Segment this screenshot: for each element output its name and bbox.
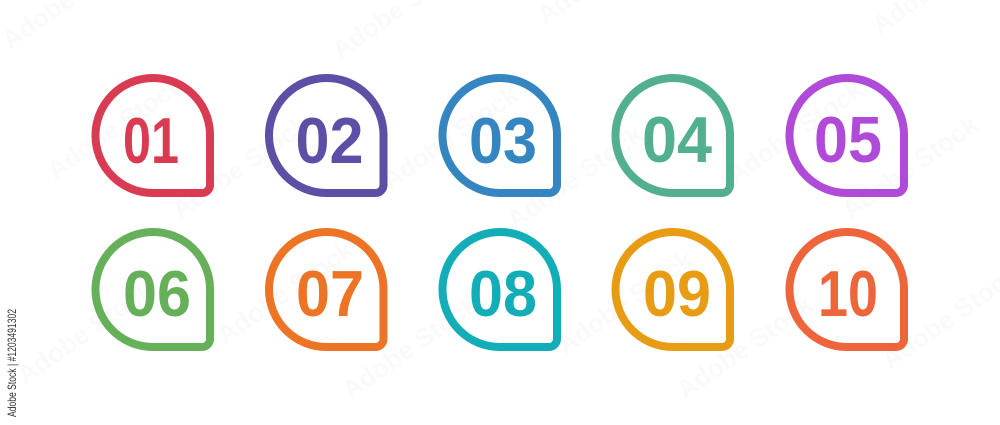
badge 08: 08 xyxy=(469,257,537,330)
watermark pattern: Adobe Stock xyxy=(836,109,984,225)
watermark pattern: Adobe Stock xyxy=(166,109,314,225)
badge 01: 01 xyxy=(123,104,179,177)
badge 01 xyxy=(95,78,210,193)
badge 10 xyxy=(789,232,904,347)
badge 05 xyxy=(789,78,904,193)
watermark pattern: Adobe Stock xyxy=(501,119,649,235)
badge 09: 09 xyxy=(643,257,711,330)
badge 08 xyxy=(442,232,557,347)
watermark pattern: Adobe Stock xyxy=(211,234,359,350)
watermark pattern: Adobe Stock xyxy=(41,69,189,185)
watermark pattern: Adobe Stock xyxy=(336,289,484,405)
badge 02 xyxy=(269,78,384,193)
badge 03: 03 xyxy=(469,104,537,177)
badge 10: 10 xyxy=(818,257,878,330)
badge 05: 05 xyxy=(814,103,882,176)
badge 04 xyxy=(615,78,730,193)
watermark pattern: Adobe Stock xyxy=(376,79,524,195)
badge 04: 04 xyxy=(642,103,712,176)
badge 09 xyxy=(615,232,730,347)
watermark pattern: Adobe Stock xyxy=(551,244,699,360)
badge 07 xyxy=(269,232,384,347)
badge 03 xyxy=(442,78,557,193)
watermark pattern: Adobe Stock xyxy=(671,289,819,405)
badge 06: 06 xyxy=(123,257,191,330)
badge 07: 07 xyxy=(296,257,364,330)
badge 02: 02 xyxy=(296,104,364,177)
stock id label: Adobe Stock | #1203491302 xyxy=(5,309,19,417)
watermark pattern: Adobe Stock xyxy=(721,74,869,190)
badge 06 xyxy=(95,232,210,347)
watermark pattern: Adobe Stock xyxy=(11,274,159,390)
